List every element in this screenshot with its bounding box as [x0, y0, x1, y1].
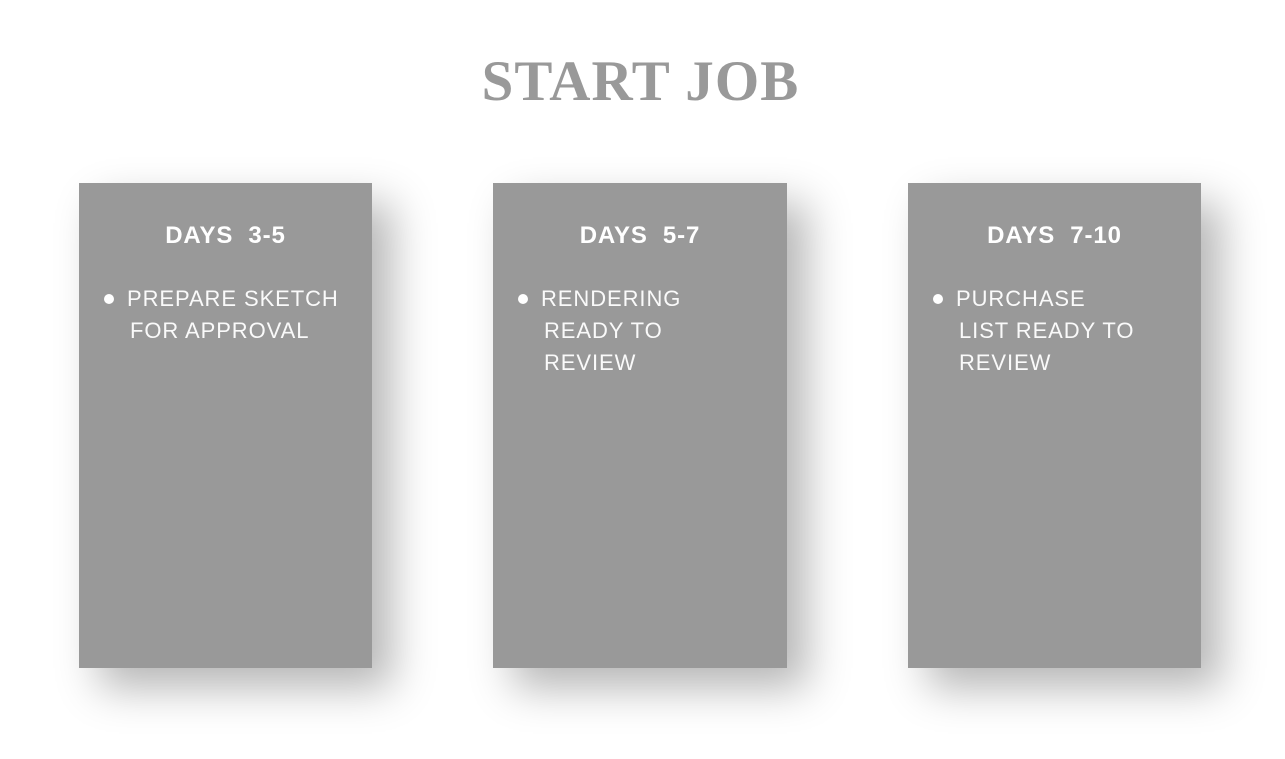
text: purchase list: PURCHASE [956, 286, 1086, 311]
text: purchase list: REVIEW [959, 350, 1051, 375]
panel: days 3-5 [79, 183, 372, 668]
text: purchase list [956, 286, 1134, 375]
heading: days 5-7: DAYS 5-7 [580, 222, 700, 249]
text: rendering: READY TO [544, 318, 663, 343]
panel: days 7-10 [908, 183, 1201, 668]
bullet [933, 294, 943, 304]
heading: days 3-5: DAYS 3-5 [165, 222, 286, 249]
text: rendering: REVIEW [544, 350, 636, 375]
title: START JOB [482, 50, 799, 113]
bullet [104, 294, 114, 304]
text: prepare sketch: FOR APPROVAL [130, 318, 309, 343]
text: prepare sketch: PREPARE SKETCH [127, 286, 339, 311]
panel: days 5-7 [493, 183, 787, 668]
heading: days 7-10: DAYS 7-10 [987, 222, 1122, 249]
text: purchase list: LIST READY TO [959, 318, 1134, 343]
text: rendering [541, 286, 681, 375]
text: rendering: RENDERING [541, 286, 681, 311]
text: prepare sketch [127, 286, 339, 343]
bullet [518, 294, 528, 304]
